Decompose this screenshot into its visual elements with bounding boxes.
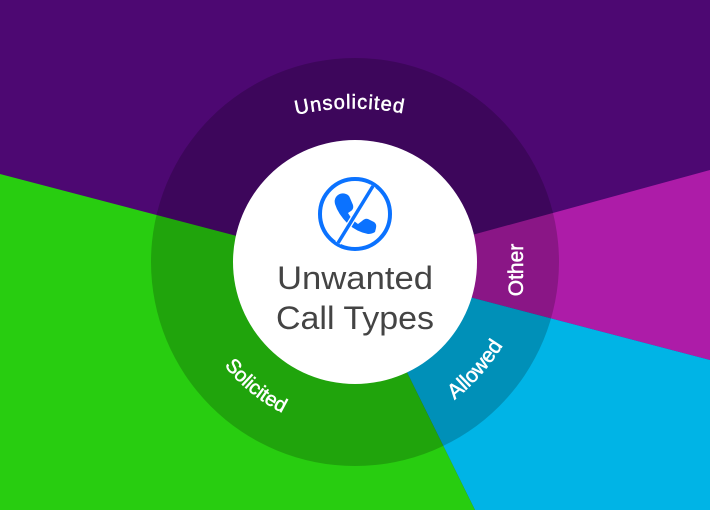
- label: Other: Other: [505, 244, 528, 296]
- title: Call Types: [276, 300, 434, 336]
- segment: unsolicited background: [0, 0, 710, 267]
- title: [276, 260, 434, 336]
- label: Allowed: Allowed: [450, 338, 503, 400]
- segment: solicited background: [0, 174, 475, 510]
- label: Unsolicited: Unsolicited: [294, 94, 404, 114]
- center circle: [233, 140, 477, 384]
- label: Solicited: Solicited: [226, 359, 288, 413]
- segment: allowed background: [355, 267, 710, 510]
- icon: crossed-out phone: [320, 179, 390, 249]
- dark ring: [151, 58, 559, 466]
- segment: other background: [355, 170, 710, 360]
- title: Unwanted: [277, 260, 433, 296]
